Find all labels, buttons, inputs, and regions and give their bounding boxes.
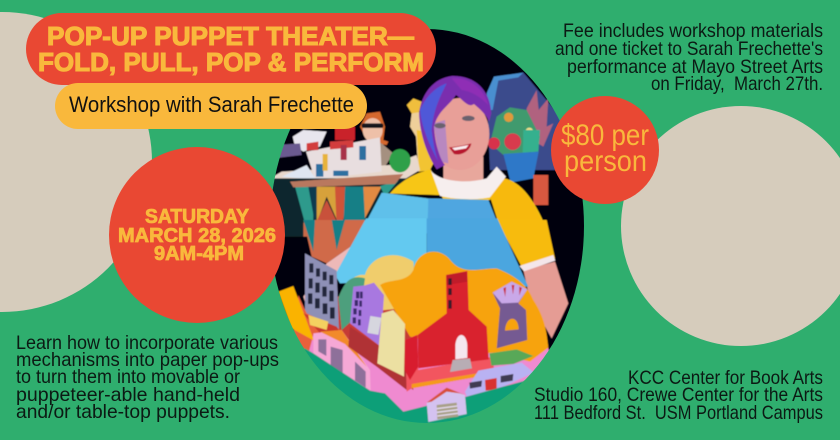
blonde puppet (407, 98, 422, 115)
small house (427, 388, 467, 422)
red church (418, 271, 489, 368)
upper photo scene (270, 73, 563, 237)
workshop description: mechanisms into paper pop-ups (16, 349, 279, 371)
blue box top (360, 193, 502, 233)
workshop description: Learn how to incorporate various (16, 332, 278, 354)
green base (290, 348, 537, 433)
puppet man (360, 112, 388, 145)
workshop description: to turn them into movable or (16, 366, 240, 388)
date text: time: 9AM-4PM (154, 243, 244, 265)
blue chair (487, 73, 563, 170)
date text: date: MARCH 28, 2026 (118, 225, 276, 247)
hills (338, 255, 417, 313)
purple tower (493, 282, 527, 349)
price badge (551, 96, 659, 204)
white collar (431, 167, 506, 199)
green patch (489, 349, 533, 366)
pink gallery (313, 330, 371, 391)
right beige circle (621, 106, 840, 346)
bouquet (527, 90, 553, 147)
cloth continuation (303, 220, 365, 263)
right arm (523, 262, 568, 338)
title line 2: FOLD, PULL, POP & PERFORM (38, 47, 424, 77)
gray building (305, 253, 339, 329)
title (26, 13, 436, 85)
workshop description: puppeteer-able hand-held (16, 384, 240, 406)
workshop description (16, 332, 279, 423)
purple building (348, 327, 407, 390)
yellow dress (387, 169, 544, 220)
left orange prop (294, 294, 340, 352)
table right (533, 175, 548, 205)
title line 1: POP-UP PUPPET THEATER— (47, 21, 414, 51)
lavender house (465, 363, 534, 397)
white prop (293, 130, 327, 152)
patterned table cloth (270, 178, 410, 237)
green bush (389, 149, 411, 172)
price line 1: $80 per (561, 119, 649, 152)
table top (274, 154, 421, 180)
subtitle pill (55, 83, 367, 129)
blue box (335, 218, 427, 283)
workshop description: and/or table-top puppets. (16, 401, 230, 423)
fee description: Fee includes workshop materials (563, 20, 823, 42)
church door (455, 335, 467, 359)
yellow sleeve (504, 219, 556, 266)
fee description: performance at Mayo Street Arts (567, 56, 823, 78)
date badge (109, 147, 285, 323)
subtitle (55, 83, 367, 129)
lower photo scene (278, 218, 568, 433)
orange ledge (488, 338, 549, 362)
table top stripe (290, 174, 403, 187)
left beige circle (0, 12, 152, 312)
title pill (26, 13, 436, 85)
photo: puppeteer with paper pop-up theater (272, 29, 584, 423)
pop-up white building (306, 137, 382, 179)
location (534, 367, 823, 424)
red base (405, 335, 494, 392)
base underlay (308, 335, 550, 412)
left arm (302, 246, 351, 302)
fee description (555, 20, 823, 95)
date circle (109, 147, 285, 323)
eyes (434, 123, 446, 128)
price line 2: person (564, 145, 647, 178)
price circle (551, 96, 659, 204)
cream building (377, 310, 405, 377)
blue vase (503, 152, 539, 183)
subtitle text: Workshop with Sarah Frechette (69, 92, 354, 117)
date text: day: SATURDAY (145, 206, 250, 228)
smile (449, 143, 471, 154)
woman hair (419, 76, 491, 169)
woman neck and face (443, 157, 483, 187)
